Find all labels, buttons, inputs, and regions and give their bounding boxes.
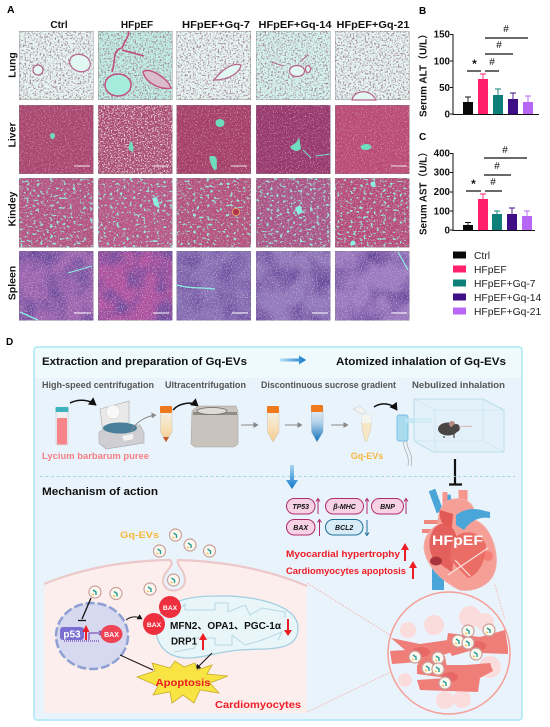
legend: Ctrl <box>474 251 490 262</box>
bar chart: serum ALT: # <box>503 24 509 35</box>
panel A: histology column headings <box>50 20 410 31</box>
nucleus with p53 and BAX: p53 <box>63 630 81 640</box>
arrows to apoptosis <box>120 653 212 670</box>
cell cytoplasm with membrane <box>44 560 307 713</box>
arrow: gradient to eppendorf <box>331 424 348 426</box>
bar chart: serum AST: 0 <box>445 226 451 236</box>
nucleus with p53 and BAX <box>56 598 128 669</box>
icon: up arrow apoptosis <box>409 561 417 579</box>
bar chart: serum ALT: # <box>496 40 502 51</box>
panel A: histology row labels <box>6 52 18 300</box>
vesicles <box>89 529 216 600</box>
heading: atomized inhalation: Atomized inhalation of Gq-EVs <box>336 356 506 368</box>
text: myocardial hypertrophy: Myocardial hypertrophy <box>286 549 401 559</box>
panel A: kidney micrographs <box>19 178 410 248</box>
icon: sucrose gradient tube <box>311 405 323 442</box>
panel A: histology row labels: Kindey <box>6 191 18 227</box>
panel D: background frame <box>34 347 522 720</box>
icon: inhalation chamber with mouse <box>414 399 504 452</box>
text: cardiomyocytes apoptosis: Cardiomyocytes apoptosis <box>286 566 406 576</box>
step labels: Ultracentrifugation <box>165 380 246 390</box>
bar chart: serum ALT: 0 <box>445 110 451 120</box>
icon: up arrow hypertrophy <box>401 543 409 561</box>
gene markers: BNP <box>380 504 395 511</box>
icon: puree vial <box>56 407 68 445</box>
dotted zoom lines <box>307 583 505 712</box>
bar chart: serum AST: 400 <box>434 148 451 160</box>
divider <box>40 476 515 478</box>
heading: extraction: Extraction and preparation of Gq-EVs <box>42 356 247 368</box>
panel A: histology row labels: Spleen <box>6 266 18 300</box>
bar chart: serum AST: Serum AST（U/L） <box>418 147 430 235</box>
step labels: Discontinuous sucrose gradient <box>261 380 396 390</box>
gene markers <box>286 498 408 536</box>
bar chart: serum ALT: # <box>489 57 495 68</box>
step labels: High-speed centrifugation <box>42 380 154 390</box>
icon: centrifuge <box>99 401 144 449</box>
bar chart: serum AST: 100 <box>434 206 451 218</box>
icon: eppendorf tube <box>353 406 371 441</box>
bar chart: serum AST: # <box>502 145 508 156</box>
bar chart: serum ALT: 50 <box>439 83 451 94</box>
inhibition bar: inhalation to HFpEF <box>449 459 462 484</box>
panel A: lung micrographs <box>19 31 410 100</box>
magnified cardiomyocytes circle <box>388 592 510 714</box>
panel A: histology column headings: HFpEF+Gq-7 <box>182 20 250 31</box>
gene markers: BCL2 <box>335 525 353 532</box>
panel label A: A <box>7 4 15 16</box>
icon: tube one <box>160 406 172 442</box>
label: Gq-EVs product: Gq-EVs <box>351 451 383 461</box>
gene markers: TP53 <box>292 504 309 511</box>
label: cardiomyocytes: Cardiomyocytes <box>215 700 302 711</box>
icon: tube two <box>267 406 279 442</box>
arrow: header blue <box>280 356 306 364</box>
panel label C: C <box>419 132 426 143</box>
panel label B: B <box>419 6 426 17</box>
apoptosis burst <box>137 661 228 703</box>
heading: mechanism of action: Mechanism of action <box>42 486 158 498</box>
panel A: histology column headings: Ctrl <box>50 20 68 31</box>
bar chart: serum AST: 300 <box>434 168 451 178</box>
legend: HFpEF+Gq-21 <box>474 307 542 318</box>
gene markers: β-MHC <box>332 504 357 511</box>
apoptosis burst: Apoptosis <box>156 678 211 689</box>
arrow: blue down <box>286 465 298 489</box>
bar chart: serum ALT: 150 <box>434 30 451 40</box>
panel A: histology column headings: HFpEF+Gq-21 <box>336 20 410 31</box>
mitochondrial gene labels <box>170 619 292 650</box>
panel A: histology row labels: Lung <box>6 52 18 78</box>
arrow: eppendorf to nebulizer <box>374 404 397 410</box>
icon: ultracentrifuge <box>191 406 238 447</box>
arrow: centrifuge to tube <box>131 415 156 431</box>
bar chart: serum AST: # <box>490 177 496 188</box>
nucleus with p53 and BAX: BAX <box>104 632 119 639</box>
BAX on mitochondrion: BAX <box>163 605 178 612</box>
bar chart: serum AST: 200 <box>434 187 451 198</box>
arrow: tube to gradient tube <box>285 424 302 426</box>
label: Gq-EVs: Gq-EVs <box>120 530 159 541</box>
icon: heart: HFpEF <box>432 533 483 548</box>
bar chart: serum ALT: * <box>472 57 477 71</box>
panel A: histology row labels: Liver <box>6 122 18 148</box>
bar chart: serum AST: # <box>494 161 500 172</box>
panel A: histology column headings: HFpEF <box>121 20 153 31</box>
arrow: ultracentrifuge to tube <box>241 424 258 426</box>
bar chart: serum AST: * <box>471 177 476 191</box>
legend: HFpEF+Gq-14 <box>474 293 542 304</box>
label: lycium barbarum puree: Lycium barbarum puree <box>42 451 149 461</box>
step labels <box>42 380 505 390</box>
legend <box>453 251 542 318</box>
bar chart: serum ALT: Serum ALT（U/L） <box>418 29 430 117</box>
step labels: Nebulized inhalation <box>412 380 505 390</box>
arrow: vial to centrifuge <box>70 400 96 405</box>
bar chart: serum ALT <box>418 24 539 120</box>
legend: HFpEF <box>474 265 507 276</box>
panel label D: D <box>6 337 13 348</box>
arrow: tube to ultracentrifuge <box>173 403 198 410</box>
legend: HFpEF+Gq-7 <box>474 279 536 290</box>
icon: nebulizer <box>397 415 432 466</box>
BAX on mitochondrion: BAX <box>147 622 162 629</box>
bar chart: serum ALT: 100 <box>434 56 451 68</box>
panel A: liver micrographs <box>19 105 410 174</box>
mitochondrial gene labels: MFN2、OPA1、PGC-1α <box>170 621 282 632</box>
panel A: spleen micrographs <box>19 251 410 320</box>
mitochondrial gene labels: DRP1 <box>171 636 197 648</box>
mitochondrion <box>156 596 298 658</box>
arrow: nucleus to BAX <box>126 617 142 620</box>
icon: heart <box>422 490 496 590</box>
BAX on mitochondrion <box>143 596 181 635</box>
panel A: histology column headings: HFpEF+Gq-14 <box>258 20 332 31</box>
gene markers: BAX <box>293 525 309 532</box>
bar chart: serum AST <box>418 145 535 236</box>
